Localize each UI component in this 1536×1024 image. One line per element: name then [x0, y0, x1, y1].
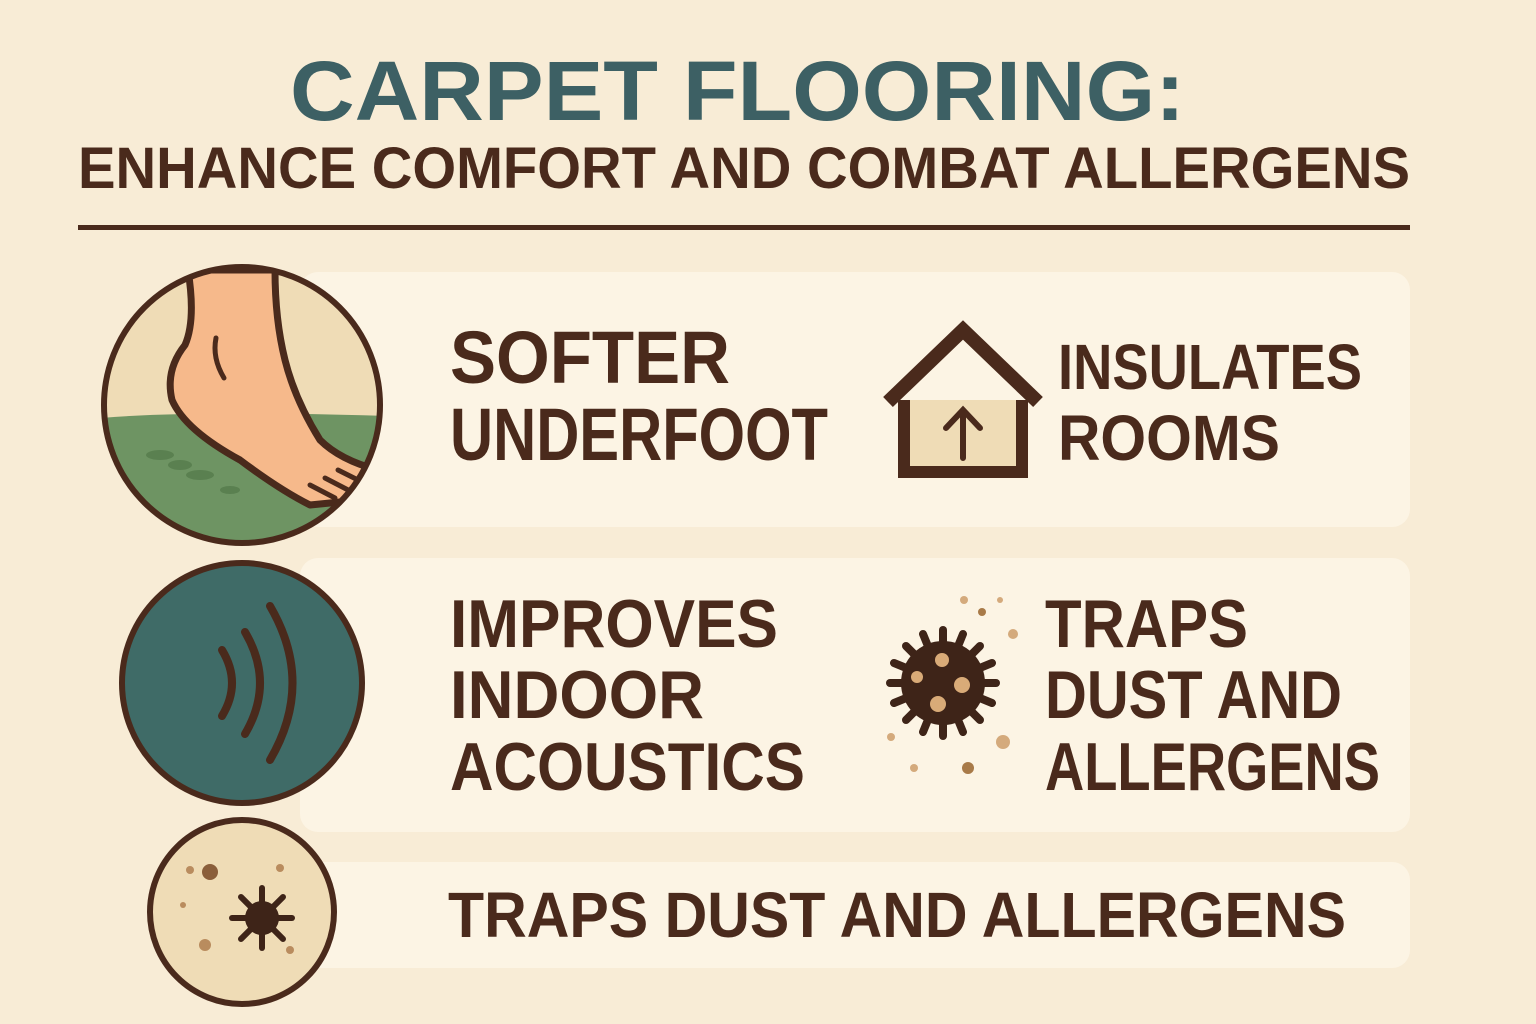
text: softer underfoot: SOFTER: [450, 316, 730, 399]
text: softer underfoot: [450, 316, 828, 476]
icon: foot on carpet: [100, 265, 390, 560]
text: insulates rooms: INSULATES: [1058, 331, 1362, 403]
text: traps dust and allergens: [1045, 586, 1380, 805]
panel: row 1: [300, 272, 1410, 527]
title: CARPET FLOORING:: [290, 44, 1185, 138]
text: insulates rooms: [1058, 331, 1362, 474]
subtitle: ENHANCE COMFORT AND COMBAT ALLERGENS: [78, 136, 1410, 201]
text: improves indoor acoustics: [450, 586, 805, 805]
panel: row 3: [300, 862, 1410, 968]
text: traps dust and allergens: DUST AND: [1045, 657, 1342, 733]
text: traps dust and allergens: TRAPS: [1045, 586, 1248, 662]
text: traps dust and allergens: ALLERGENS: [1045, 729, 1380, 805]
icon: dust virus: [887, 596, 1018, 774]
panel: row 2: [300, 558, 1410, 832]
text: bottom traps dust: TRAPS DUST AND ALLERGENS: [448, 879, 1346, 951]
icon: house with arrow: [888, 330, 1038, 472]
icon: allergen circle: [150, 820, 334, 1004]
icon: sound waves: [122, 563, 362, 803]
text: softer underfoot: UNDERFOOT: [450, 393, 828, 476]
text: improves indoor acoustics: ACOUSTICS: [450, 729, 805, 805]
text: insulates rooms: ROOMS: [1058, 402, 1280, 474]
text: improves indoor acoustics: INDOOR: [450, 657, 704, 733]
text: improves indoor acoustics: IMPROVES: [450, 586, 778, 662]
